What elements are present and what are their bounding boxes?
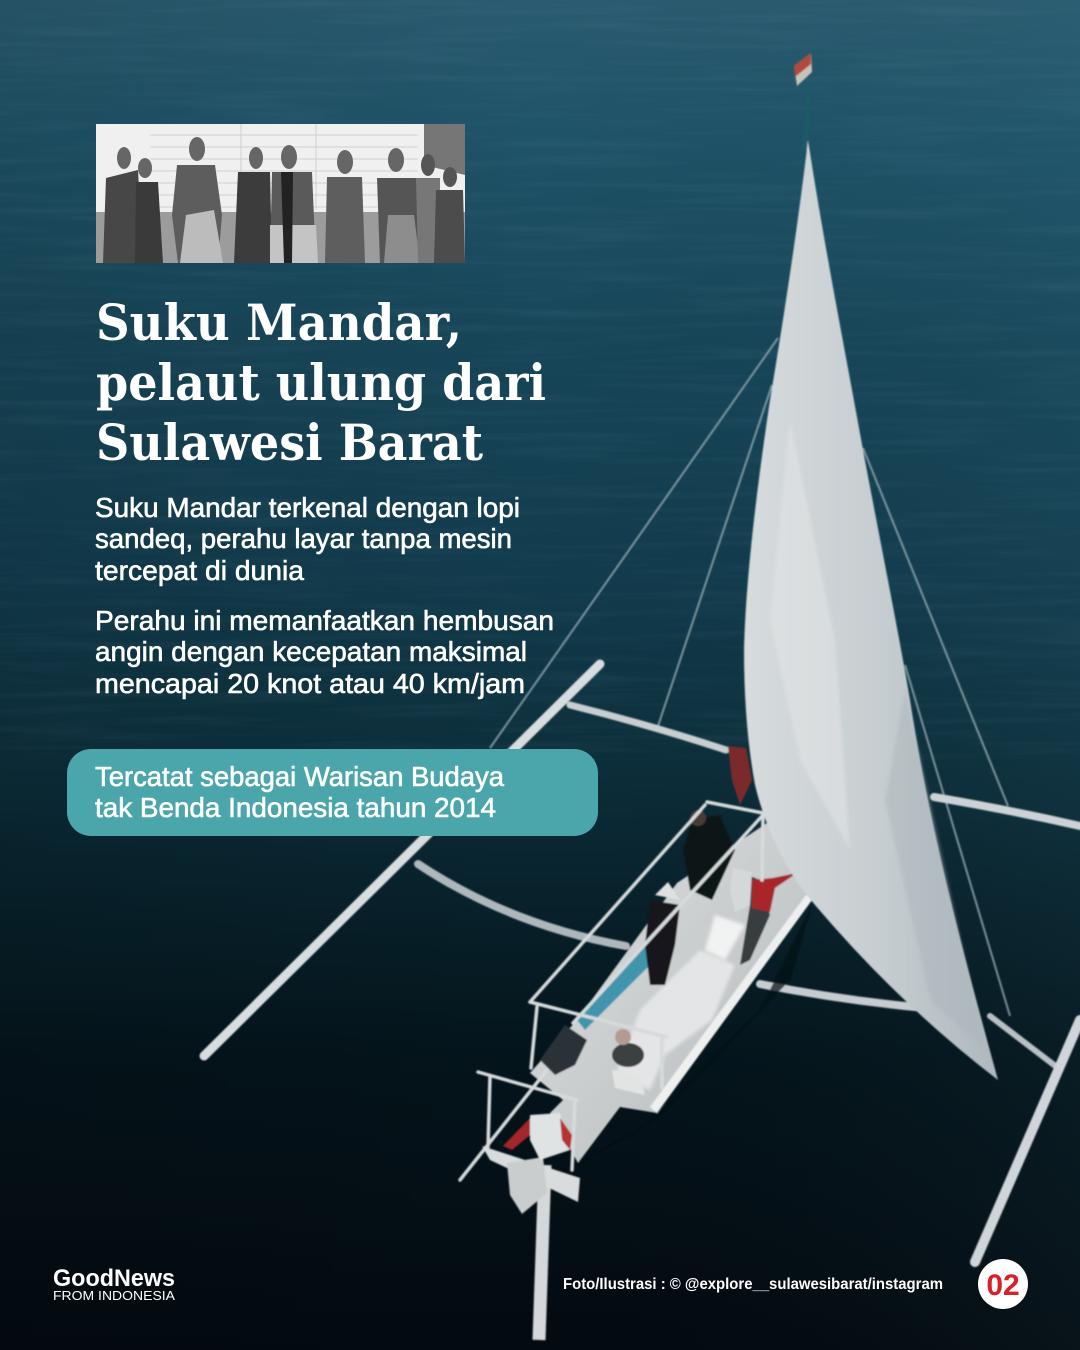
paragraph: speed — [95, 605, 554, 699]
standing figures — [103, 137, 465, 263]
logo: GoodNews from Indonesia: FROM INDONESIA — [53, 1289, 176, 1303]
railings — [460, 802, 763, 1180]
outrigger poles and beams — [204, 664, 1080, 1340]
deck and hull — [530, 823, 812, 1163]
paragraph: speed: angin dengan kecepatan maksimal — [95, 636, 527, 667]
callout: heritage status: tak Benda Indonesia tahun 2014 — [95, 792, 496, 823]
title — [96, 293, 546, 472]
title: Suku Mandar, — [96, 293, 462, 352]
paragraph: speed: mencapai 20 knot atau 40 km/jam — [95, 668, 525, 699]
title: Sulawesi Barat — [96, 413, 483, 472]
photo credit: Foto/Ilustrasi : © @explore__sulawesibarat/instagram — [563, 1276, 943, 1293]
logo: GoodNews from Indonesia: GoodNews — [53, 1265, 175, 1292]
crew figures — [612, 746, 797, 1095]
mast and flag — [794, 53, 812, 150]
paragraph: lopi sandeq: Suku Mandar terkenal dengan lopi — [95, 492, 520, 523]
callout: heritage status — [67, 749, 598, 836]
archival photo: Mandar women — [96, 124, 465, 263]
dark cargo — [540, 1025, 587, 1075]
logo: GoodNews from Indonesia — [53, 1265, 176, 1303]
paragraph: lopi sandeq: tercepat di dunia — [95, 555, 304, 586]
boat illustration: sandeq outrigger sailing boat — [204, 53, 1080, 1340]
white clapboard wall — [150, 124, 418, 210]
hull shadow on water — [575, 905, 812, 1165]
title: pelaut ulung dari — [96, 353, 546, 412]
bow with crew and cloth — [482, 1113, 580, 1214]
blue tarp — [577, 943, 650, 1030]
paragraph: lopi sandeq — [95, 492, 520, 586]
paragraph: lopi sandeq: sandeq, perahu layar tanpa mesin — [95, 523, 512, 554]
rigging stays — [490, 338, 1010, 1016]
paragraph: speed: Perahu ini memanfaatkan hembusan — [95, 605, 554, 636]
callout: heritage status: Tercatat sebagai Warisan Budaya — [95, 761, 504, 792]
page number badge: 02 — [986, 1269, 1020, 1302]
white sail — [744, 140, 998, 1080]
page number badge — [978, 1259, 1028, 1309]
